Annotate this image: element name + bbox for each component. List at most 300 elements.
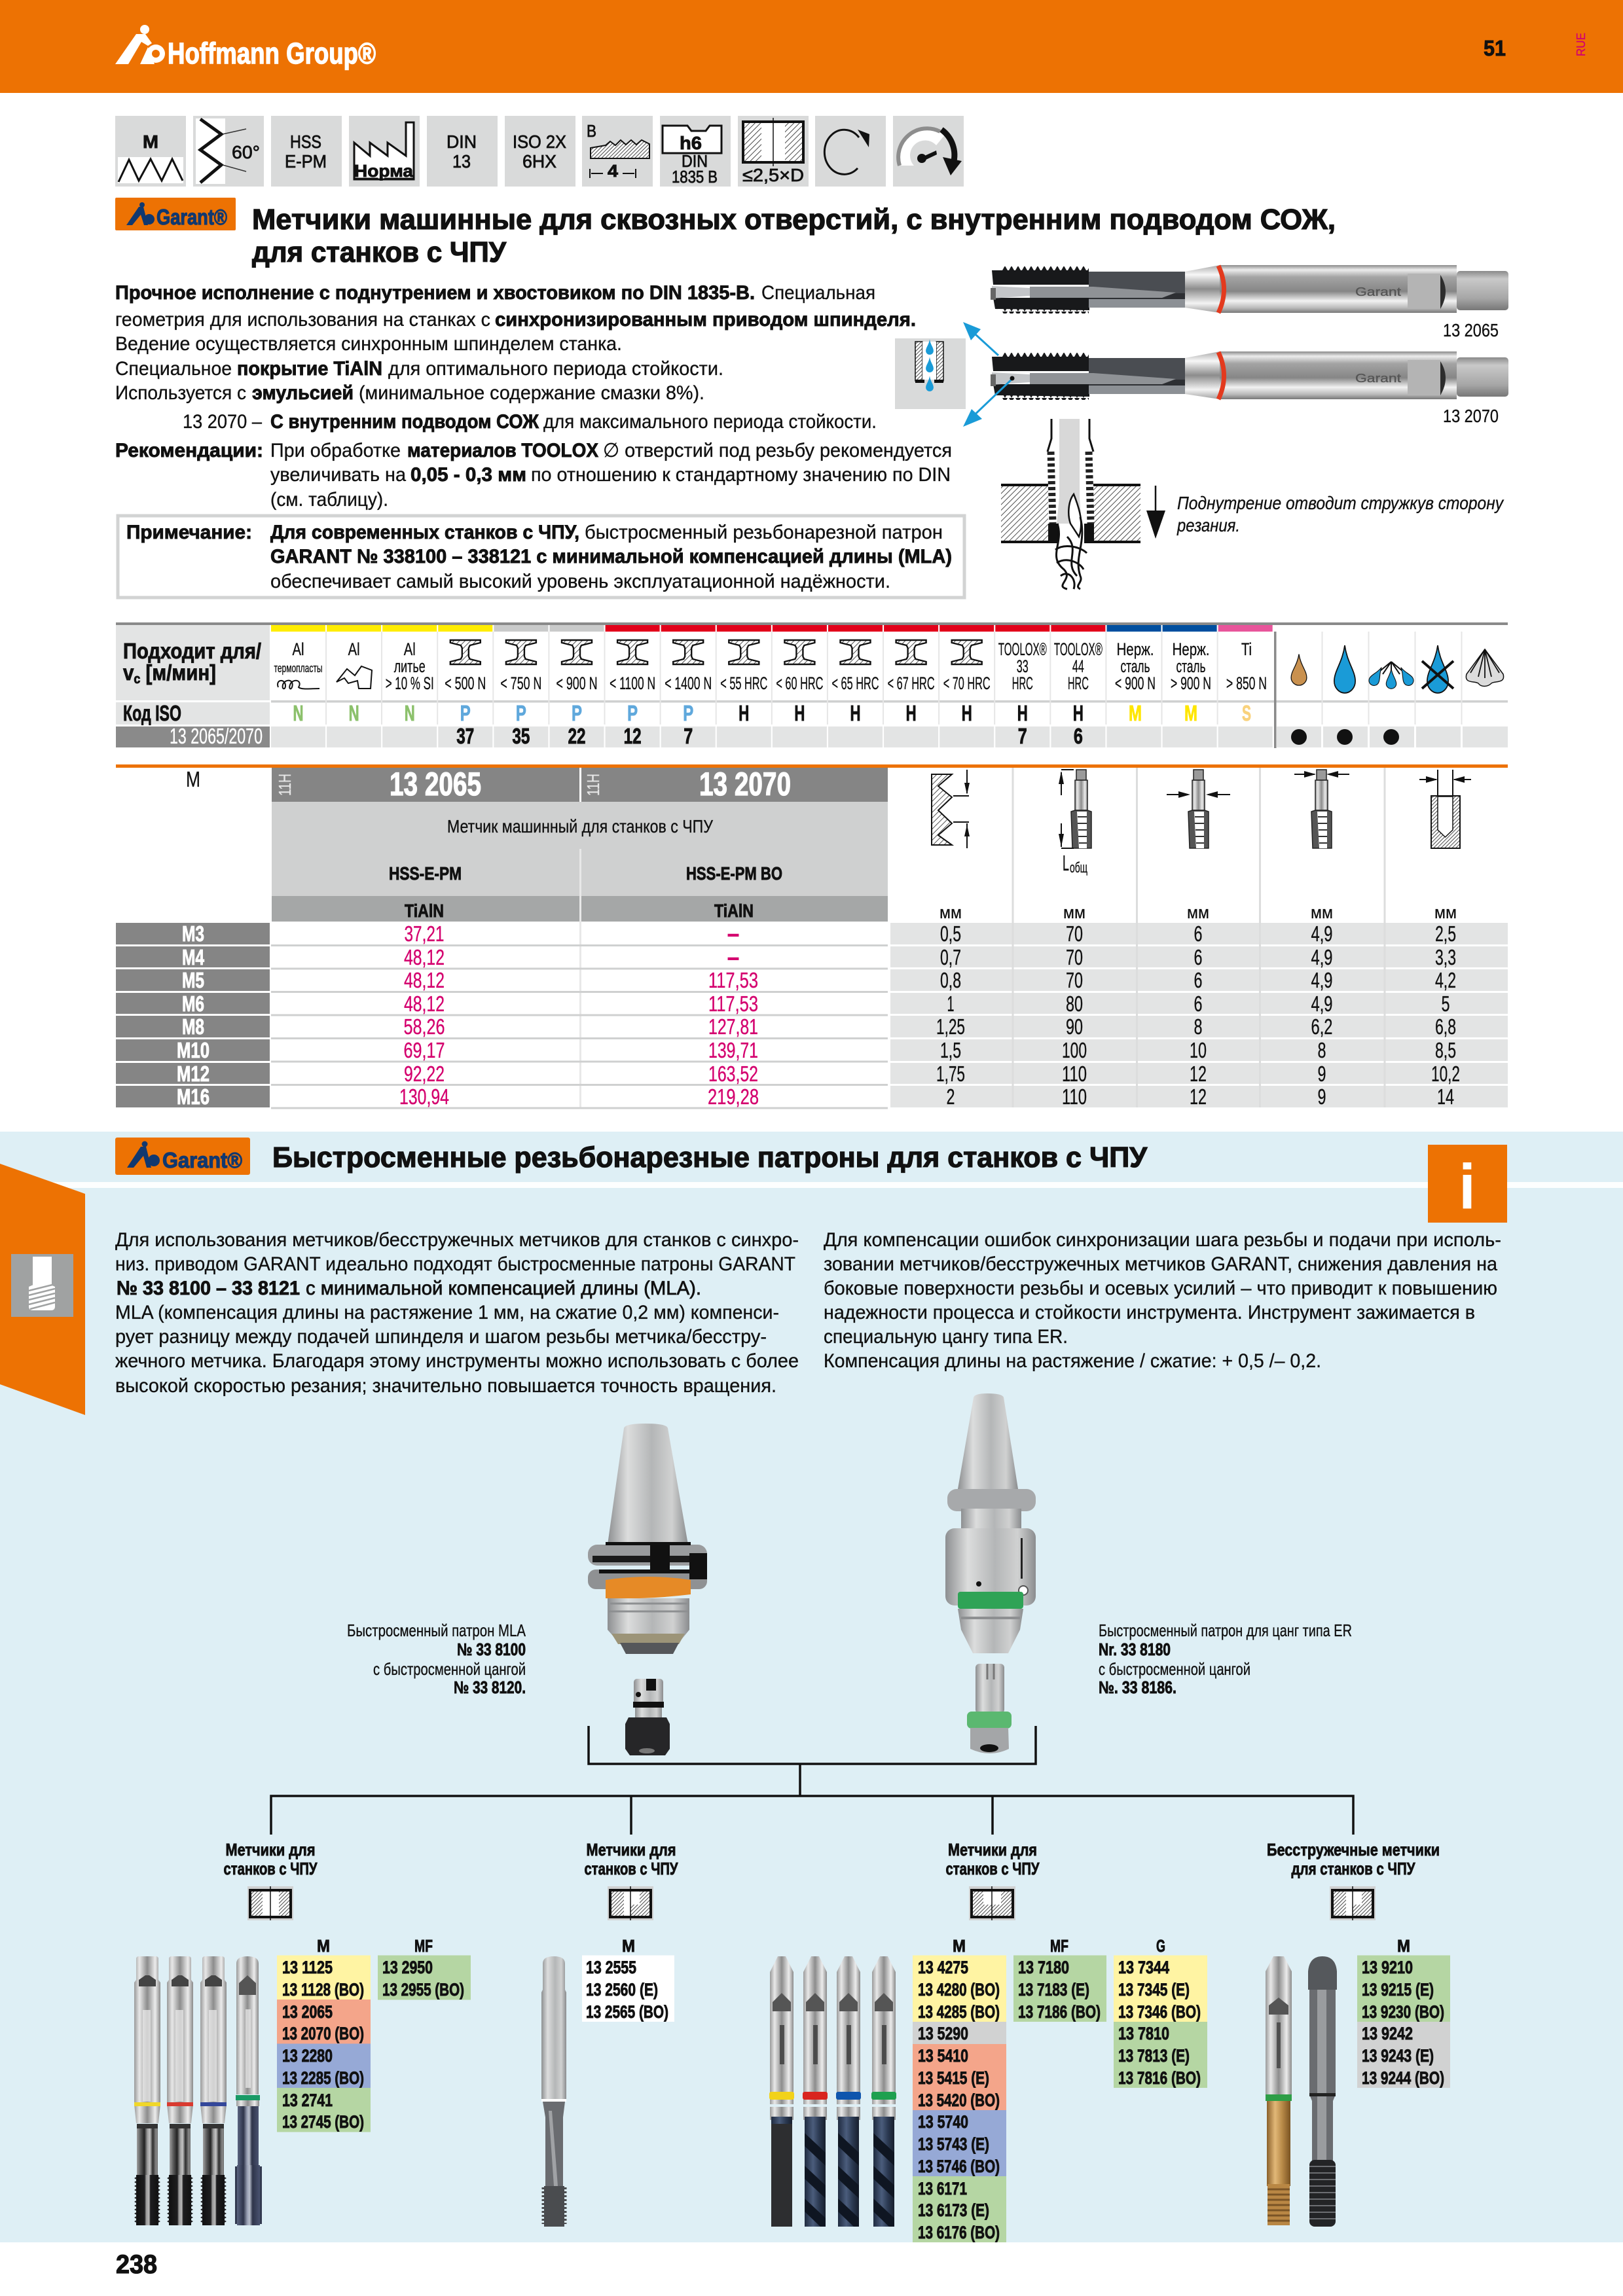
group heading [584, 1840, 678, 1878]
note box: Примечание: [126, 522, 252, 543]
article header band: 11H [583, 774, 603, 796]
row labels: 13 2065/2070 [170, 724, 263, 748]
article list M: 13 2070 (BO) [282, 2024, 364, 2043]
material headers: HRC [1012, 673, 1033, 693]
dimension values: pitch: 0,5 [940, 922, 961, 946]
dimension values: length: 70 [1066, 945, 1083, 969]
article list M: 13 9230 (BO) [1362, 2002, 1444, 2022]
material headers: Нерж. [1117, 639, 1154, 659]
prices 13 2070 [708, 922, 759, 1109]
article list M: 13 5740 [918, 2112, 968, 2132]
icon: blind hole forming [1330, 1886, 1376, 1920]
Garant logo top [115, 198, 236, 230]
icon: h6 shank DIN 1835 B: h6 [680, 133, 702, 153]
description text block: Специальная [761, 282, 875, 304]
dimension values: square: 8 [1317, 1038, 1326, 1062]
description text block: 13 2070 – [183, 411, 262, 433]
dimension values: core hole: 6,8 [1435, 1014, 1456, 1039]
column heads: G [1156, 1936, 1165, 1956]
row labels: Подходит для/ [123, 639, 261, 663]
dimension diagrams [932, 770, 1471, 876]
mm unit labels: мм [939, 903, 962, 922]
material headers: Нерж. [1172, 639, 1210, 659]
description text block: При обработке [270, 440, 401, 461]
text column left: высокой скоростью резания; значительно повышается точность вращения. [115, 1375, 776, 1397]
row labels: c [134, 672, 140, 687]
dimension values: core hole: 4,2 [1435, 968, 1456, 992]
material headers: TOOLOX® [1054, 639, 1103, 659]
material headers: < 1100 N [610, 673, 655, 693]
icon: HSS E-PM: E-PM [285, 151, 327, 171]
dimension values: shank: 12 [1190, 1062, 1207, 1086]
ISO code letters: P [516, 701, 526, 725]
dimension values: pitch: 2 [947, 1085, 955, 1109]
material headers: 44 [1072, 656, 1084, 676]
material headers: сталь [1176, 656, 1206, 676]
description text block: Прочное исполнение с поднутрением и хвостовиком по DIN 1835-B. [115, 282, 755, 304]
material headers: < 65 HRC [831, 673, 879, 693]
description text block: Специальное [115, 358, 232, 380]
dimension values: length: 70 [1066, 922, 1083, 946]
ISO code letters: S [1242, 701, 1251, 725]
thread size column: M6 [182, 992, 204, 1016]
article list M: 13 2280 [282, 2046, 333, 2066]
icon: DIN 13: 13 [452, 151, 471, 171]
dimension values: core hole: 5 [1442, 992, 1450, 1016]
column head: M [1397, 1936, 1410, 1956]
photo: single tap [541, 1956, 566, 2227]
note box: Для современных станков с ЧПУ, [270, 522, 579, 543]
connector tree [271, 1726, 1353, 1835]
ISO code letters: M [1184, 701, 1197, 725]
column heads: MF [1050, 1936, 1068, 1956]
material headers: термопласты [274, 662, 322, 675]
label 13 2065: 13 2065 [1443, 320, 1499, 340]
photo: ER collet [967, 1664, 1012, 1753]
column head: M [622, 1936, 635, 1956]
article list M: 13 9244 (BO) [1362, 2068, 1444, 2088]
icon: ISO 2X 6HX: 6HX [522, 151, 556, 171]
article header band: 13 2070 [699, 766, 791, 802]
Hoffmann Group logo: Hoffmann Group® [168, 37, 376, 70]
article list G: 13 7810 [1118, 2024, 1169, 2043]
heading: Быстросменные резьбонарезные патроны для станков с ЧПУ [272, 1141, 1148, 1174]
thread size column: M4 [182, 945, 204, 969]
article list M: 13 1128 (BO) [282, 1980, 364, 2000]
group heading [224, 1840, 318, 1878]
dimension values: shank: 6 [1194, 992, 1202, 1016]
cutting speed values: 12 [624, 724, 642, 748]
ISO code letters: H [1017, 701, 1028, 725]
article list G: 13 7813 (E) [1118, 2046, 1190, 2066]
article header band: HSS-E-PM BO [686, 863, 782, 884]
dimension values: square [1311, 922, 1333, 1109]
article list M: 13 9215 (E) [1362, 1980, 1434, 2000]
text column left: № 33 8100 – 33 8121 [117, 1278, 300, 1299]
prices 13 2070: 163,52 [708, 1062, 758, 1086]
article list M: 13 2560 (E) [586, 1980, 658, 2000]
material headers: HRC [1068, 673, 1089, 693]
page number top: 51 [1484, 36, 1506, 60]
row labels [123, 639, 263, 748]
dimension values: pitch: 1 [947, 992, 955, 1016]
dimension values: core hole: 3,3 [1435, 945, 1456, 969]
article list M: 13 2745 (BO) [282, 2112, 364, 2132]
caption: ER chuck: с быстросменной цангой [1099, 1659, 1250, 1679]
article list M: 13 9243 (E) [1362, 2046, 1434, 2066]
cutting speed values: 7 [1018, 724, 1027, 748]
prices 13 2065: 130,94 [399, 1085, 449, 1109]
dimension values: pitch: 1,75 [936, 1062, 965, 1086]
row labels: v [123, 660, 135, 685]
article list M: 13 6176 (BO) [918, 2223, 1000, 2242]
dimension values: length: 110 [1062, 1062, 1087, 1086]
mm unit labels: мм [1187, 903, 1209, 922]
prices 13 2070: 117,53 [708, 992, 758, 1016]
dimension values: square: 4,9 [1311, 945, 1333, 969]
article header band: Метчик машинный для станков с ЧПУ [447, 816, 713, 836]
dimension values: shank: 6 [1194, 945, 1202, 969]
dimension values: shank: 8 [1194, 1014, 1202, 1039]
description text block: (см. таблицу). [270, 489, 388, 511]
column heads [953, 1936, 1165, 1956]
group heading [1267, 1840, 1440, 1878]
group heading: для станков с ЧПУ [1291, 1859, 1415, 1878]
description text block: материалов TOOLOX [407, 440, 598, 461]
description text block: эмульсией [252, 382, 354, 404]
group heading: Метчики для [225, 1840, 316, 1859]
thread size column: M12 [177, 1062, 210, 1086]
description text block: синхронизированным приводом шпинделя. [495, 309, 916, 331]
icon: through hole 2.5xD: ≤2,5×D [742, 165, 804, 185]
description text block: (минимальное содержание смазки 8%). [359, 382, 704, 404]
article header band: 11H [275, 774, 295, 796]
group heading: станков с ЧПУ [584, 1859, 678, 1878]
article list M [277, 1956, 371, 2132]
panel: quick-change tapping chucks [0, 1132, 1623, 2242]
article header band: TiAlN [714, 901, 754, 921]
cutting data table [116, 622, 1508, 748]
material headers: < 900 N [1115, 673, 1156, 693]
material headers: Ti [1241, 639, 1252, 659]
group heading: Метчики для [948, 1840, 1037, 1859]
dimension values: pitch [936, 922, 965, 1109]
article list M: 13 2555 [586, 1958, 636, 1977]
photo: four taps [134, 1956, 262, 2225]
dimension values: core hole: 10,2 [1431, 1062, 1460, 1086]
icon: ISO 2X 6HX: ISO 2X [513, 132, 566, 152]
material headers: сталь [1121, 656, 1150, 676]
group heading [945, 1840, 1040, 1878]
ISO code letters: H [906, 701, 917, 725]
description text block: геометрия для использования на станках с [115, 309, 490, 331]
ISO code letters: H [1073, 701, 1084, 725]
icon: HSS E-PM [271, 116, 342, 187]
coolant icons [1291, 645, 1504, 693]
info badge: i [1459, 1152, 1475, 1222]
icon: rotation arrow [815, 116, 886, 187]
prices 13 2065: 48,12 [404, 968, 445, 992]
diagram: overall length: общ [1070, 859, 1087, 876]
prices 13 2070: 127,81 [708, 1014, 758, 1039]
ISO code letters: P [572, 701, 582, 725]
text column right: боковые поверхности резьбы и осевых усилий – что приводит к повышению [824, 1278, 1497, 1299]
prices 13 2065: 58,26 [403, 1014, 445, 1039]
dimension values: pitch: 1,5 [940, 1038, 961, 1062]
title: Метчики машинные для сквозных отверстий, с внутренним подводом СОЖ, [252, 204, 1336, 236]
text column right: специальную цангу типа ER. [824, 1326, 1068, 1348]
caption: undercut: Поднутрение отводит стружкув сторону [1177, 493, 1504, 513]
photo: MLA chuck [588, 1424, 707, 1654]
thread size column: M16 [177, 1085, 210, 1109]
article list M: 13 2741 [282, 2090, 333, 2110]
article list M: 13 1125 [282, 1958, 333, 1977]
cutting speed values: 7 [684, 724, 693, 748]
row labels: Код ISO [123, 701, 181, 725]
caption: ER chuck: Быстросменный патрон для цанг типа ER [1099, 1621, 1352, 1640]
photo: four spiral taps [769, 1956, 896, 2227]
dimension values: square: 6,2 [1311, 1014, 1333, 1039]
material headers: Al [292, 639, 304, 659]
article list MF [378, 1956, 471, 2000]
ISO code letters [293, 701, 1251, 725]
ISO code letters: P [460, 701, 471, 725]
icon: DIN 13 [427, 116, 498, 187]
row labels: [м/мин] [140, 660, 216, 685]
icon: h6 shank DIN 1835 B: 1835 B [672, 167, 718, 187]
prices 13 2070: – [727, 945, 739, 969]
label 13 2070: 13 2070 [1443, 406, 1499, 426]
caption: undercut [1176, 493, 1504, 535]
cutting speed values: 22 [568, 724, 585, 748]
thread size column: M8 [182, 1014, 204, 1039]
article list MF [1013, 1956, 1106, 2022]
article list M: 13 4285 (BO) [918, 2002, 1000, 2022]
article list M: 13 6173 (E) [918, 2200, 989, 2220]
Garant logo top: Garant® [156, 205, 227, 229]
icon: internal coolant [895, 338, 966, 409]
note box: быстросменный резьбонарезной патрон [585, 522, 943, 543]
language tag: RUE [1575, 33, 1588, 56]
note box [118, 516, 964, 598]
dimension values: square: 9 [1317, 1062, 1326, 1086]
thread size column: M10 [177, 1038, 210, 1062]
text column right: надежности процесса и стойкости инструмента. Инструмент зажимается в [824, 1302, 1475, 1323]
icon: DIN 13: DIN [447, 132, 477, 152]
title [252, 204, 1336, 268]
material headers: TOOLOX® [998, 639, 1047, 659]
mm unit labels: мм [1434, 903, 1457, 922]
text column left: с минимальной компенсацией длины (MLA). [306, 1278, 701, 1299]
ISO code letters: H [794, 701, 805, 725]
ISO code letters: N [349, 701, 359, 725]
group heading: станков с ЧПУ [224, 1859, 318, 1878]
article list M: 13 5420 (BO) [918, 2090, 1000, 2110]
material colour bars [271, 625, 1273, 632]
diagram: shank diameter [1167, 770, 1230, 848]
description text block: для оптимального периода стойкости. [388, 358, 723, 380]
dimension cells [890, 923, 1508, 1107]
dimension values: pitch: 0,7 [940, 945, 961, 969]
note box: GARANT № 338100 – 338121 с минимальной компенсацией длины (MLA) [270, 546, 952, 567]
column heads: M [317, 1936, 330, 1956]
text column right [824, 1229, 1501, 1372]
caption: MLA chuck: № 33 8100 [457, 1640, 526, 1659]
material headers: < 70 HRC [943, 673, 991, 693]
dimension values: shank: 10 [1190, 1038, 1207, 1062]
dimension values: square: 4,9 [1311, 968, 1333, 992]
dimension values: shank: 12 [1190, 1085, 1207, 1109]
text column left: рует разницу между подачей шпинделя и шагом резьбы метчика/бесстру- [115, 1326, 767, 1348]
material headers: > 900 N [1171, 673, 1211, 693]
mm unit labels [939, 903, 1457, 922]
caption: MLA chuck: № 33 8120. [454, 1677, 526, 1697]
article header band: 13 2065 [390, 766, 481, 802]
description text block: увеличивать на [270, 464, 406, 486]
ISO code letters: M [1129, 701, 1142, 725]
Garant logo lower: Garant® [162, 1148, 242, 1172]
article list MF: 13 7186 (BO) [1018, 2002, 1101, 2022]
column separators [326, 632, 1461, 725]
article list M: 13 2065 [282, 2002, 333, 2022]
dimension values: length: 80 [1066, 992, 1083, 1016]
grey data cells [271, 726, 1508, 747]
group: taps 1 [134, 1840, 471, 2225]
description text block: 0,05 - 0,3 мм [410, 464, 526, 486]
ISO code letters: P [683, 701, 693, 725]
caption: MLA chuck [347, 1621, 526, 1697]
product table: M [186, 767, 200, 791]
icon: 60 degree [193, 116, 264, 187]
description text block: покрытие TiAlN [237, 358, 382, 380]
article list M: 13 6171 [918, 2179, 967, 2198]
article list M: 13 2565 (BO) [586, 2002, 668, 2022]
text column left: низ. приводом GARANT идеально подходят быстросменные патроны GARANT [115, 1253, 795, 1275]
material headers: < 67 HRC [888, 673, 935, 693]
ISO code letters: N [293, 701, 304, 725]
description text block: Рекомендации: [115, 440, 263, 461]
ISO code letters: P [627, 701, 638, 725]
diagram: core hole [1419, 770, 1471, 848]
diagram: overall length: L [1063, 851, 1069, 875]
cutting speed values: 37 [456, 724, 474, 748]
dimension values: shank: 6 [1194, 968, 1202, 992]
icon: ISO 2X 6HX [505, 116, 575, 187]
prices 13 2065: 48,12 [404, 945, 445, 969]
description text block: Ведение осуществляется синхронным шпинделем станка. [115, 333, 622, 355]
material headers: < 60 HRC [776, 673, 823, 693]
article list G: 13 7816 (BO) [1118, 2068, 1201, 2088]
group: taps 3 [769, 1840, 1207, 2242]
material headers: < 750 N [500, 673, 541, 693]
dimension values: pitch: 1,25 [936, 1014, 965, 1039]
article list M [1357, 1956, 1450, 2088]
prices 13 2070: 139,71 [708, 1038, 758, 1062]
dimension values: core hole: 2,5 [1435, 922, 1456, 946]
text column right: Для компенсации ошибок синхронизации шага резьбы и подачи при исполь- [824, 1229, 1501, 1251]
group: taps 2 [541, 1840, 678, 2227]
dimension values: core hole: 8,5 [1435, 1038, 1456, 1062]
dimension values: square: 4,9 [1311, 922, 1333, 946]
prices 13 2065: 48,12 [404, 992, 445, 1016]
icon: blind hole narrow [608, 1886, 653, 1920]
description text block: по отношению к стандартному значению по DIN [531, 464, 951, 486]
photo: tap 13 2070 [991, 351, 1508, 400]
icon: factory norm: Норма [354, 161, 414, 181]
prices 13 2065: 92,22 [404, 1062, 445, 1086]
material headers: < 55 HRC [720, 673, 767, 693]
description text block: Используется с [115, 382, 246, 404]
material headers: Al [348, 639, 360, 659]
thread size column: M3 [182, 922, 204, 946]
prices 13 2065: 37,21 [405, 922, 444, 946]
arrow: chip direction [1146, 486, 1165, 539]
material headers: < 1400 N [665, 673, 712, 693]
icon: speed gauge [893, 116, 964, 187]
article list M: 13 5415 (E) [918, 2068, 989, 2088]
article list M: 13 5746 (BO) [918, 2157, 1000, 2176]
group heading: Бесстружечные метчики [1267, 1840, 1440, 1859]
diagram: square size [1294, 770, 1349, 848]
mm unit labels: мм [1063, 903, 1085, 922]
icon: factory norm [349, 116, 420, 187]
icon: through hole [247, 1886, 293, 1920]
article list M: 13 4280 (BO) [918, 1980, 1000, 2000]
group heading: станков с ЧПУ [945, 1859, 1040, 1878]
article list M: 13 5743 (E) [918, 2134, 989, 2154]
photo: ER chuck [945, 1393, 1036, 1653]
dimension values: length: 110 [1062, 1085, 1087, 1109]
article header band [272, 766, 888, 1107]
dimension values: length: 70 [1066, 968, 1083, 992]
icon: h6 shank DIN 1835 B [660, 116, 731, 187]
material headers: < 500 N [445, 673, 486, 693]
dimension values: length [1062, 922, 1087, 1109]
article list M: 13 9242 [1362, 2024, 1413, 2043]
article list M: 13 2285 (BO) [282, 2068, 364, 2088]
article list M: 13 9210 [1362, 1958, 1413, 1977]
Hoffmann Group logo [115, 25, 376, 70]
icon: through hole 2.5xD [738, 116, 809, 187]
diagram: undercut chip removal [1001, 419, 1140, 589]
icon: HSS E-PM: HSS [290, 132, 321, 152]
dimension values: core hole: 14 [1437, 1085, 1454, 1109]
icon: B chamfer form: 4 [608, 161, 619, 181]
dimension values: shank: 6 [1194, 922, 1202, 946]
description text block [115, 282, 952, 511]
article list MF: 13 2955 (BO) [382, 1980, 464, 2000]
dimension values: square: 4,9 [1311, 992, 1333, 1016]
text column right: Компенсация длины на растяжение / сжатие: + 0,5 /– 0,2. [824, 1350, 1321, 1372]
row lines [271, 945, 888, 1108]
text column left: жечного метчика. Благодаря этому инструменты можно использовать с более [115, 1350, 799, 1372]
article list G: 13 7345 (E) [1118, 1980, 1190, 2000]
Garant logo lower [115, 1138, 250, 1175]
photo: MLA collet [625, 1679, 670, 1755]
prices 13 2065 [399, 922, 449, 1109]
prices 13 2070: – [727, 922, 739, 946]
ISO code letters: H [739, 701, 749, 725]
article list M: 13 4275 [918, 1958, 968, 1977]
article list G: 13 7346 (BO) [1118, 2002, 1201, 2022]
prices 13 2070: 219,28 [708, 1085, 759, 1109]
article list M [913, 1956, 1006, 2242]
text column left: MLA (компенсация длины на растяжение 1 мм, на сжатие 0,2 мм) компенси- [115, 1302, 779, 1323]
info badge [1428, 1145, 1507, 1223]
material headers: < 900 N [556, 673, 597, 693]
dimension values: core hole [1431, 922, 1460, 1109]
prices 13 2065: 69,17 [403, 1038, 445, 1062]
